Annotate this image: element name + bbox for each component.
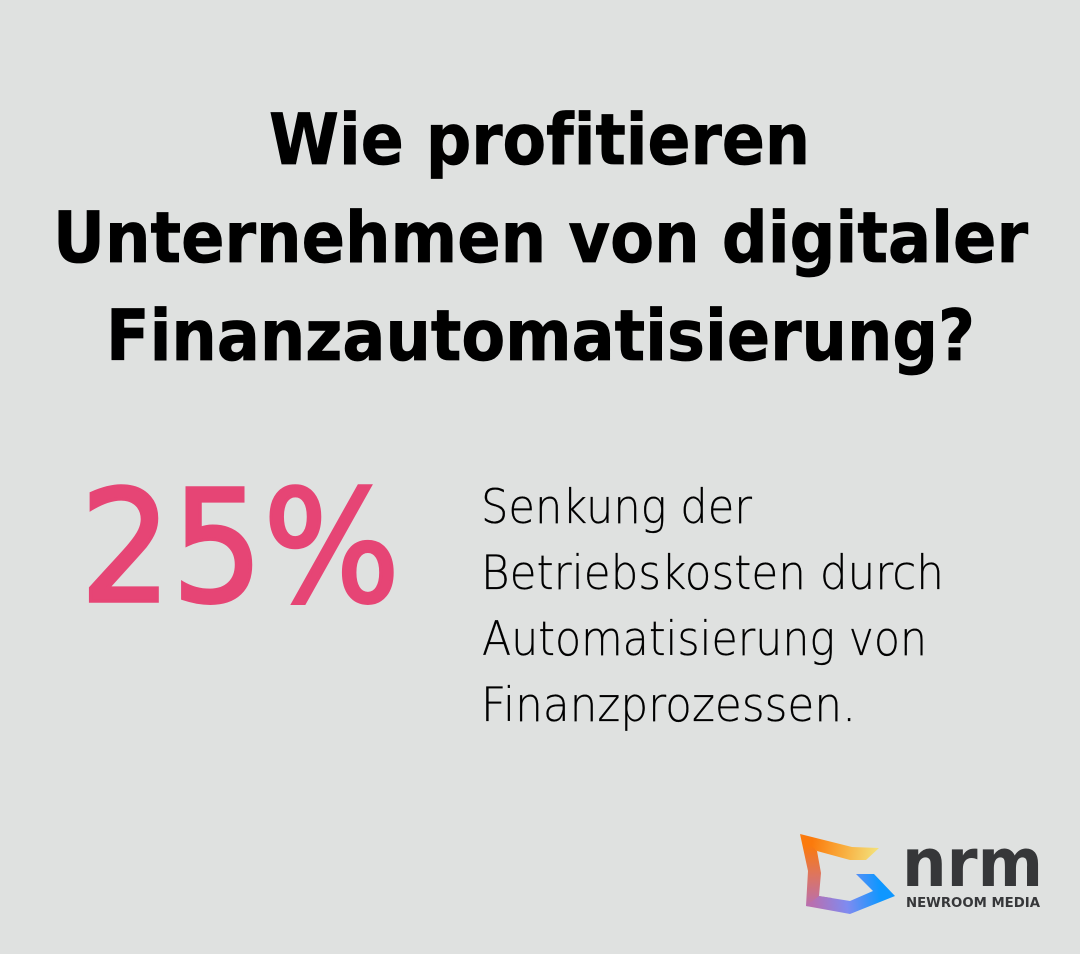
description text: Automatisierung von bbox=[482, 612, 927, 667]
description text bbox=[481, 480, 944, 733]
icon: logo mark bbox=[800, 834, 895, 914]
description text: Senkung der bbox=[481, 480, 753, 535]
logo: Newroom Media bbox=[800, 824, 1043, 914]
description text: Finanzprozessen. bbox=[481, 678, 856, 733]
statistic: 25%: 25% bbox=[80, 457, 400, 638]
title: Wie profitieren bbox=[269, 99, 810, 181]
title: Finanzautomatisierung? bbox=[106, 295, 975, 377]
description text: Betriebskosten durch bbox=[481, 546, 944, 601]
tagline: NEWROOM MEDIA bbox=[906, 896, 1040, 911]
title bbox=[53, 99, 1028, 377]
wordmark: nrm bbox=[902, 824, 1043, 902]
